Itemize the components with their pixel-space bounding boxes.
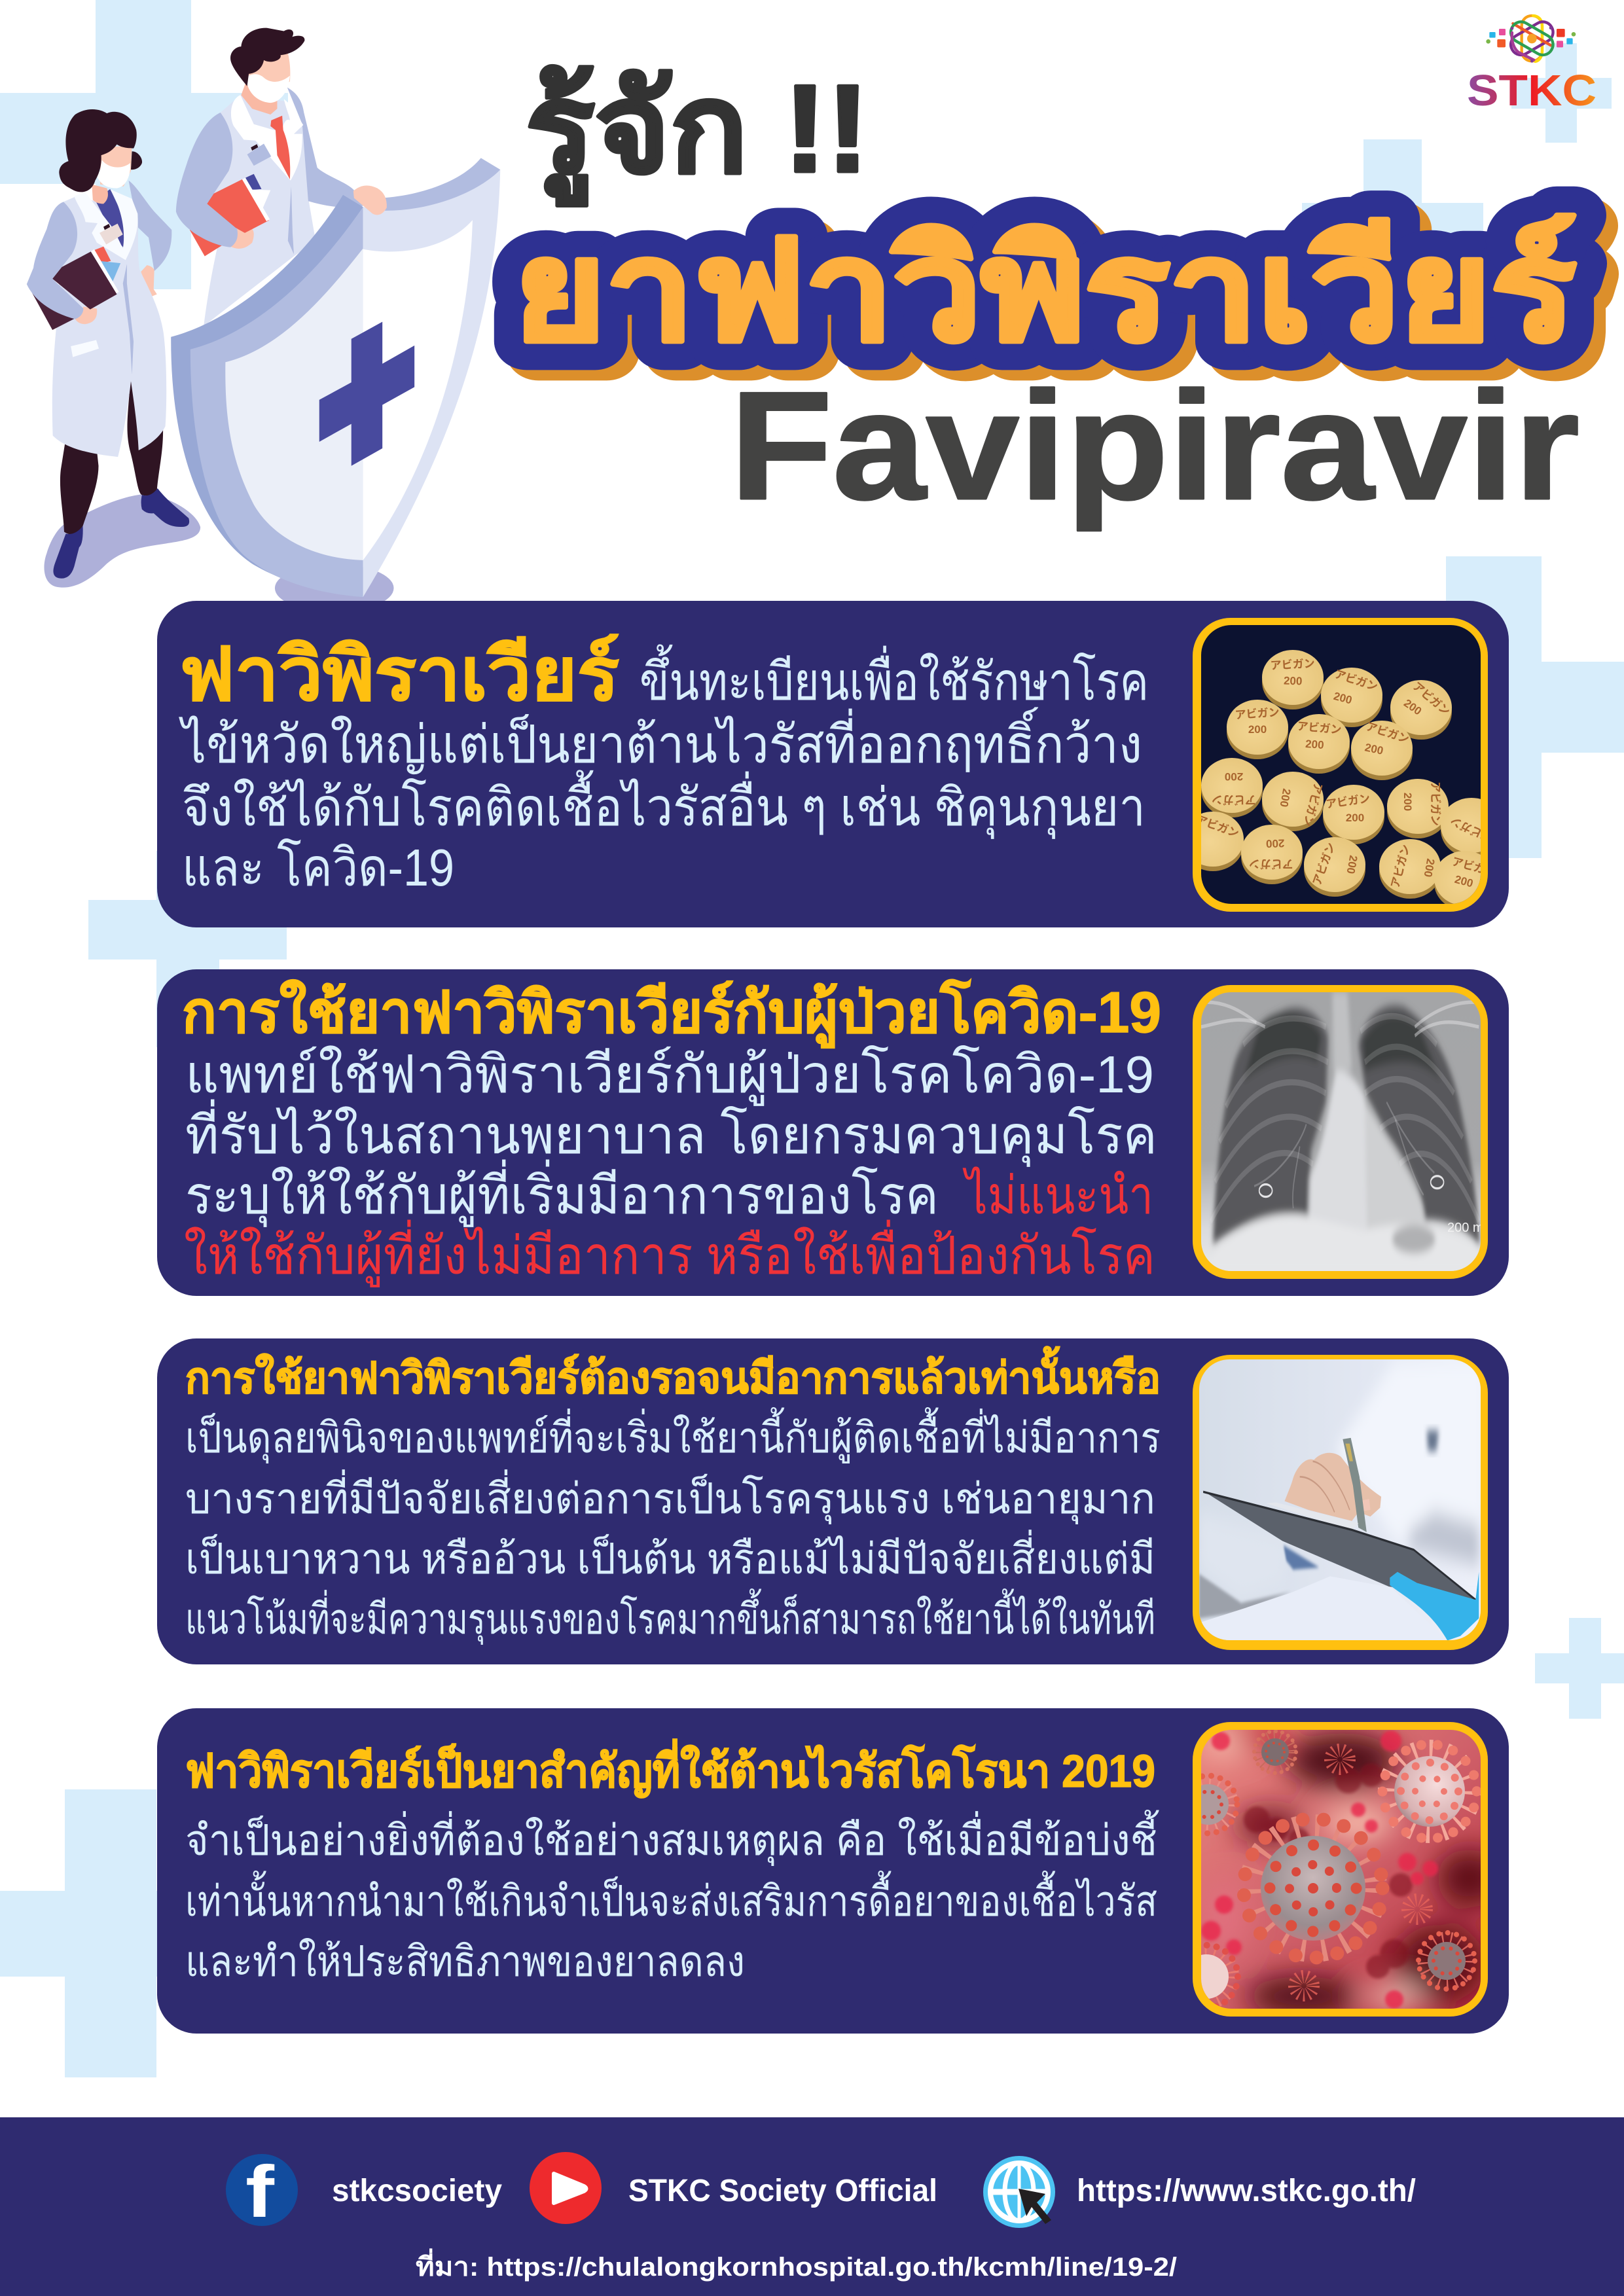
photo frame: coronavirus bbox=[1175, 1722, 1502, 2017]
youtube channel: STKC Society Official bbox=[628, 2174, 937, 2208]
virus: faint small bbox=[1295, 1750, 1426, 1995]
photo frame: favipiravir tablets: アビガン bbox=[1388, 843, 1413, 889]
panel 3: must symptoms appear first bbox=[157, 1338, 1509, 1664]
panel 1 text: ไข้หวัดใหญ่แต่เป็นยาต้านไวรัสที่ออกฤทธิ์กว้าง bbox=[178, 707, 1142, 774]
virus: large centre bbox=[1244, 1819, 1382, 1958]
photo frame: favipiravir tablets: 200 bbox=[1225, 770, 1243, 783]
footer bar bbox=[0, 2117, 1624, 2296]
photo frame: chest x-ray bbox=[1193, 985, 1494, 1279]
panel 4 text bbox=[185, 1738, 1160, 1985]
photo frame: favipiravir tablets: 200 bbox=[1401, 697, 1424, 717]
photo frame: favipiravir tablets bbox=[1182, 618, 1502, 912]
icon: website globe bbox=[983, 2156, 1055, 2228]
icon: facebook: f bbox=[245, 2151, 275, 2233]
photo frame: favipiravir tablets: 200 bbox=[1401, 793, 1414, 811]
icon: facebook bbox=[226, 2151, 298, 2233]
shield bbox=[171, 158, 500, 597]
panel 1: what favipiravir is bbox=[157, 601, 1509, 927]
panel 4: important antiviral bbox=[157, 1708, 1509, 2034]
facebook handle: stkcsociety bbox=[332, 2174, 502, 2208]
panel 1 text: และ โควิด-19 bbox=[182, 838, 454, 897]
photo frame: favipiravir tablets: アビガン bbox=[1249, 857, 1293, 870]
panel 3 text: บางรายที่มีปัจจัยเสี่ยงต่อการเป็นโรครุนแรง เช่นอายุมาก bbox=[185, 1469, 1155, 1525]
panel 4 text: เท่านั้นหากนำมาใช้เกินจำเป็นจะส่งเสริมการดื้อยาของเชื้อไวรัส bbox=[185, 1871, 1157, 1925]
title: ยาฟาวิพิราเวียร์: ยาฟาวิพิราเวียร์ bbox=[514, 213, 1576, 368]
photo frame: favipiravir tablets: 200 bbox=[1266, 837, 1285, 850]
icon: youtube bbox=[530, 2152, 602, 2224]
virus: bottom right bbox=[1418, 1933, 1475, 1989]
panel 2 text: ที่รับไว้ในสถานพยาบาล โดยกรมควบคุมโรค bbox=[185, 1100, 1157, 1167]
illustration: doctors with shield bbox=[27, 28, 500, 612]
panel 3 text: การใช้ยาฟาวิพิราเวียร์ต้องรอจนมีอาการแล้วเท่านั้นหรือ bbox=[185, 1346, 1161, 1402]
x-ray scale label: 200 mm bbox=[1447, 1221, 1494, 1235]
panel 3 text bbox=[185, 1346, 1161, 1645]
photo frame: favipiravir tablets: アビガン bbox=[1410, 679, 1453, 718]
logo emblem bbox=[1486, 16, 1576, 63]
panel 4 text: และทำให้ประสิทธิภาพของยาลดลง bbox=[185, 1937, 745, 1985]
photo frame: favipiravir tablets: アビガン bbox=[1212, 793, 1256, 806]
photo frame: favipiravir tablets: 200 bbox=[1453, 873, 1475, 890]
website url: https://www.stkc.go.th/ bbox=[1077, 2174, 1416, 2208]
photo frame: favipiravir tablets: アビガン bbox=[1364, 719, 1411, 745]
photo frame: favipiravir tablets: アビガン bbox=[1195, 812, 1240, 840]
photo frame: favipiravir tablets: 200 bbox=[1344, 854, 1360, 875]
panel 2: use in COVID-19 patients bbox=[157, 969, 1509, 1296]
virus: small top bbox=[1254, 1731, 1296, 1773]
panel 2 text: แพทย์ใช้ฟาวิพิราเวียร์กับผู้ป่วยโรคโควิด-19 bbox=[185, 1045, 1154, 1106]
logo: STKC bbox=[1467, 16, 1597, 115]
photo frame: favipiravir tablets: 200 bbox=[1248, 723, 1267, 736]
photo frame: favipiravir tablets: 200 bbox=[1278, 787, 1293, 808]
panel 2 text: การใช้ยาฟาวิพิราเวียร์กับผู้ป่วยโควิด-19 bbox=[182, 979, 1161, 1049]
panel 1 text: ขึ้นทะเบียนเพื่อใช้รักษาโรค bbox=[640, 644, 1149, 711]
photo frame: favipiravir tablets: アビガン bbox=[1301, 781, 1325, 828]
photo frame: favipiravir tablets: アビガン bbox=[1448, 814, 1494, 845]
photo frame: favipiravir tablets: 200 bbox=[1332, 690, 1354, 707]
doctor: man bbox=[176, 28, 363, 326]
photo frame: favipiravir tablets: アビガン bbox=[1429, 781, 1442, 826]
panel 2 text: ให้ใช้กับผู้ที่ยังไม่มีอาการ หรือใช้เพื่อป้องกันโรค bbox=[184, 1220, 1155, 1287]
photo frame: favipiravir tablets: アビガン bbox=[1325, 791, 1371, 811]
panel 3 text: เป็นดุลยพินิจของแพทย์ที่จะเริ่มใช้ยานี้กับผู้ติดเชื้อที่ไม่มีอาการ bbox=[185, 1407, 1161, 1464]
title: รู้จัก !!: รู้จัก !! bbox=[526, 60, 869, 206]
title: ยาฟาวิพิราเวียร์: ยาฟาวิพิราเวียร์ bbox=[514, 213, 1576, 368]
photo frame: favipiravir tablets: アビガン bbox=[1297, 719, 1342, 736]
photo frame: favipiravir tablets: アビガン bbox=[1451, 855, 1497, 879]
photo frame: favipiravir tablets: アビガン bbox=[1310, 841, 1337, 887]
photo frame: favipiravir tablets: 200 bbox=[1363, 741, 1384, 757]
photo frame: favipiravir tablets: アビガン bbox=[1333, 667, 1379, 693]
panel 2 text: ระบุให้ใช้กับผู้ที่เริ่มมีอาการของโรค bbox=[185, 1160, 939, 1227]
photo frame: favipiravir tablets: 200 bbox=[1346, 812, 1364, 824]
virus: top right bbox=[1382, 1744, 1477, 1839]
panel 3 text: แนวโน้มที่จะมีความรุนแรงของโรคมากขึ้นก็สามารถใช้ยานี้ได้ในทันที bbox=[185, 1588, 1155, 1645]
title: Favipiravir: Favipiravir bbox=[730, 359, 1579, 531]
panel 1 text: ฟาวิพิราเวียร์ bbox=[179, 634, 619, 715]
photo frame: favipiravir tablets: 200 bbox=[1305, 738, 1324, 751]
panel 4 text: ฟาวิพิราเวียร์เป็นยาสำคัญที่ใช้ต้านไวรัสโคโรนา 2019 bbox=[185, 1738, 1155, 1799]
doctor: woman bbox=[27, 109, 189, 579]
photo frame: doctor writing on clipboard bbox=[1193, 1355, 1488, 1650]
virus: bottom left bbox=[1201, 1942, 1241, 2007]
floor shadows bbox=[44, 494, 394, 612]
photo frame: favipiravir tablets: 200 bbox=[1422, 857, 1437, 878]
photo frame: favipiravir tablets: アビガン bbox=[1270, 656, 1315, 672]
source line: ที่มา: https://chulalongkornhospital.go.th/kcmh/line/19-2/ bbox=[416, 2248, 1177, 2282]
photo frame: favipiravir tablets: 200 bbox=[1284, 675, 1303, 687]
panel 2 text bbox=[182, 979, 1161, 1287]
virus: left edge bbox=[1201, 1772, 1240, 1837]
panel 1 text bbox=[178, 634, 1149, 897]
title: ยาฟาวิพิราเวียร์: ยาฟาวิพิราเวียร์ bbox=[526, 224, 1587, 379]
panel 4 text: จำเป็นอย่างยิ่งที่ต้องใช้อย่างสมเหตุผล คือ ใช้เมื่อมีข้อบ่งชี้ bbox=[185, 1810, 1160, 1867]
panel 2 text: ไม่แนะนำ bbox=[962, 1166, 1153, 1225]
panel 1 text: จึงใช้ได้กับโรคติดเชื้อไวรัสอื่น ๆ เช่น ชิคุนกุนยา bbox=[182, 770, 1146, 839]
logo wordmark: STKC bbox=[1467, 66, 1597, 115]
panel 3 text: เป็นเบาหวาน หรืออ้วน เป็นต้น หรือแม้ไม่มีปัจจัยเสี่ยงแต่มี bbox=[185, 1530, 1155, 1583]
photo frame: favipiravir tablets: アビガン bbox=[1235, 706, 1280, 721]
